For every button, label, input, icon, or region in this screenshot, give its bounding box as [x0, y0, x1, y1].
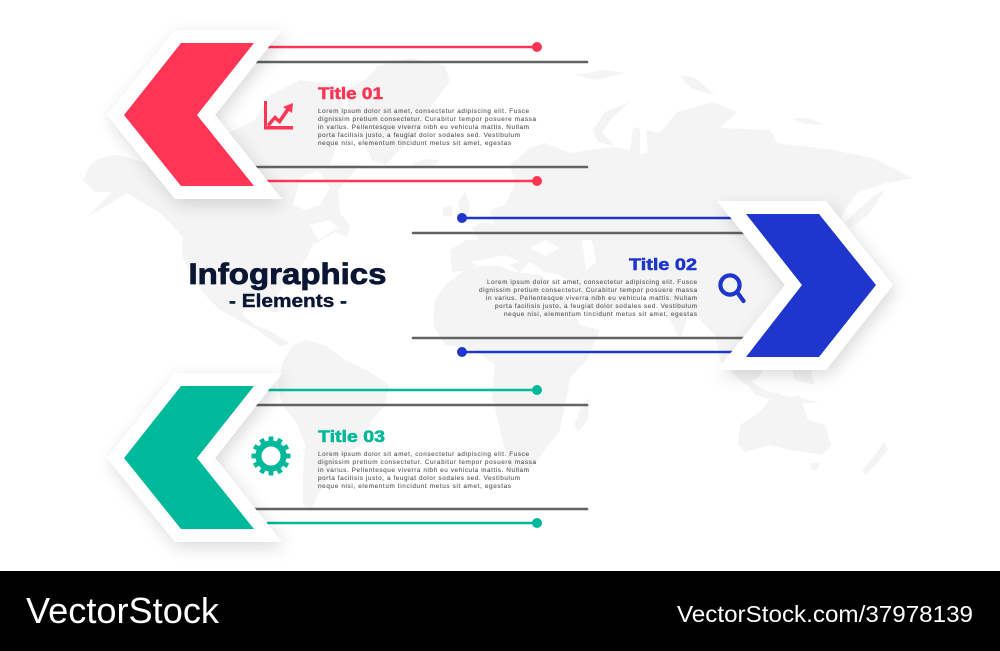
- icon: gear: [252, 436, 290, 476]
- british isles: [443, 192, 470, 218]
- text block 02: [479, 279, 697, 318]
- japan: [845, 190, 885, 228]
- eurasia: [450, 102, 913, 385]
- text block 02: in varius. Pellentesque viverra nibh eu vehicula mattis. Nullam: [486, 295, 697, 302]
- text block 01: [318, 108, 536, 147]
- text block 03: Lorem ipsum dolor sit amet, consectetur adipiscing elit. Fusce: [318, 451, 529, 458]
- footer bar: [0, 571, 1000, 651]
- africa: [433, 262, 600, 470]
- icon: magnifier: [720, 275, 744, 301]
- south america: [278, 340, 389, 512]
- text block 01: neque nisi, elementum tincidunt metus sit amet, egestas: [318, 140, 511, 147]
- indonesia: [740, 362, 820, 405]
- text block 01: porta facilisis justo, a feugiat dolor sodales sed. Vestibulum: [318, 132, 520, 139]
- text block 03: [318, 451, 536, 490]
- chevron: green: [107, 373, 282, 542]
- tasmania: [810, 463, 820, 470]
- text block 03: porta facilisis justo, a feugiat dolor sodales sed. Vestibulum: [318, 475, 520, 482]
- madagascar: [574, 398, 590, 432]
- iceland: [412, 159, 440, 168]
- title 01: Title 01: [318, 84, 383, 103]
- map inland seas: [293, 125, 648, 325]
- text block 03: neque nisi, elementum tincidunt metus sit amet, egestas: [318, 483, 511, 490]
- australia: [738, 392, 831, 455]
- text block 03: dignissim pretium consectetur. Curabitur tempor posuere massa: [318, 459, 536, 466]
- text block 02: neque nisi, elementum tincidunt metus sit amet, egestas: [504, 311, 697, 318]
- footer image id: VectorStock.com/37978139: [677, 601, 973, 627]
- text block 01: dignissim pretium consectetur. Curabitur tempor posuere massa: [318, 116, 536, 123]
- text block 01: Lorem ipsum dolor sit amet, consectetur adipiscing elit. Fusce: [318, 108, 529, 115]
- title 02: Title 02: [629, 255, 697, 274]
- footer logo: VectorStock: [26, 590, 220, 631]
- icon: growth chart: [264, 101, 293, 130]
- main heading: Infographics: [188, 258, 386, 291]
- lines: green: [250, 385, 587, 528]
- title 03: Title 03: [318, 427, 385, 446]
- arctic islands: [575, 70, 825, 125]
- new zealand: [862, 442, 888, 475]
- chevron: red: [107, 30, 282, 199]
- lines: red: [250, 42, 587, 186]
- world map background: [83, 58, 913, 512]
- text block 02: Lorem ipsum dolor sit amet, consectetur adipiscing elit. Fusce: [487, 279, 697, 286]
- north america: [83, 80, 360, 347]
- novaya zemlya: [593, 102, 630, 146]
- text block 03: in varius. Pellentesque viverra nibh eu vehicula mattis. Nullam: [318, 467, 529, 474]
- lines: blue: [413, 213, 750, 357]
- greenland: [345, 58, 450, 165]
- subheading: - Elements -: [229, 291, 347, 311]
- chevron: blue: [717, 201, 893, 370]
- text block 02: porta facilisis justo, a feugiat dolor sodales sed. Vestibulum: [495, 303, 697, 310]
- text block 01: in varius. Pellentesque viverra nibh eu vehicula mattis. Nullam: [318, 124, 529, 131]
- text block 02: dignissim pretium consectetur. Curabitur tempor posuere massa: [479, 287, 697, 294]
